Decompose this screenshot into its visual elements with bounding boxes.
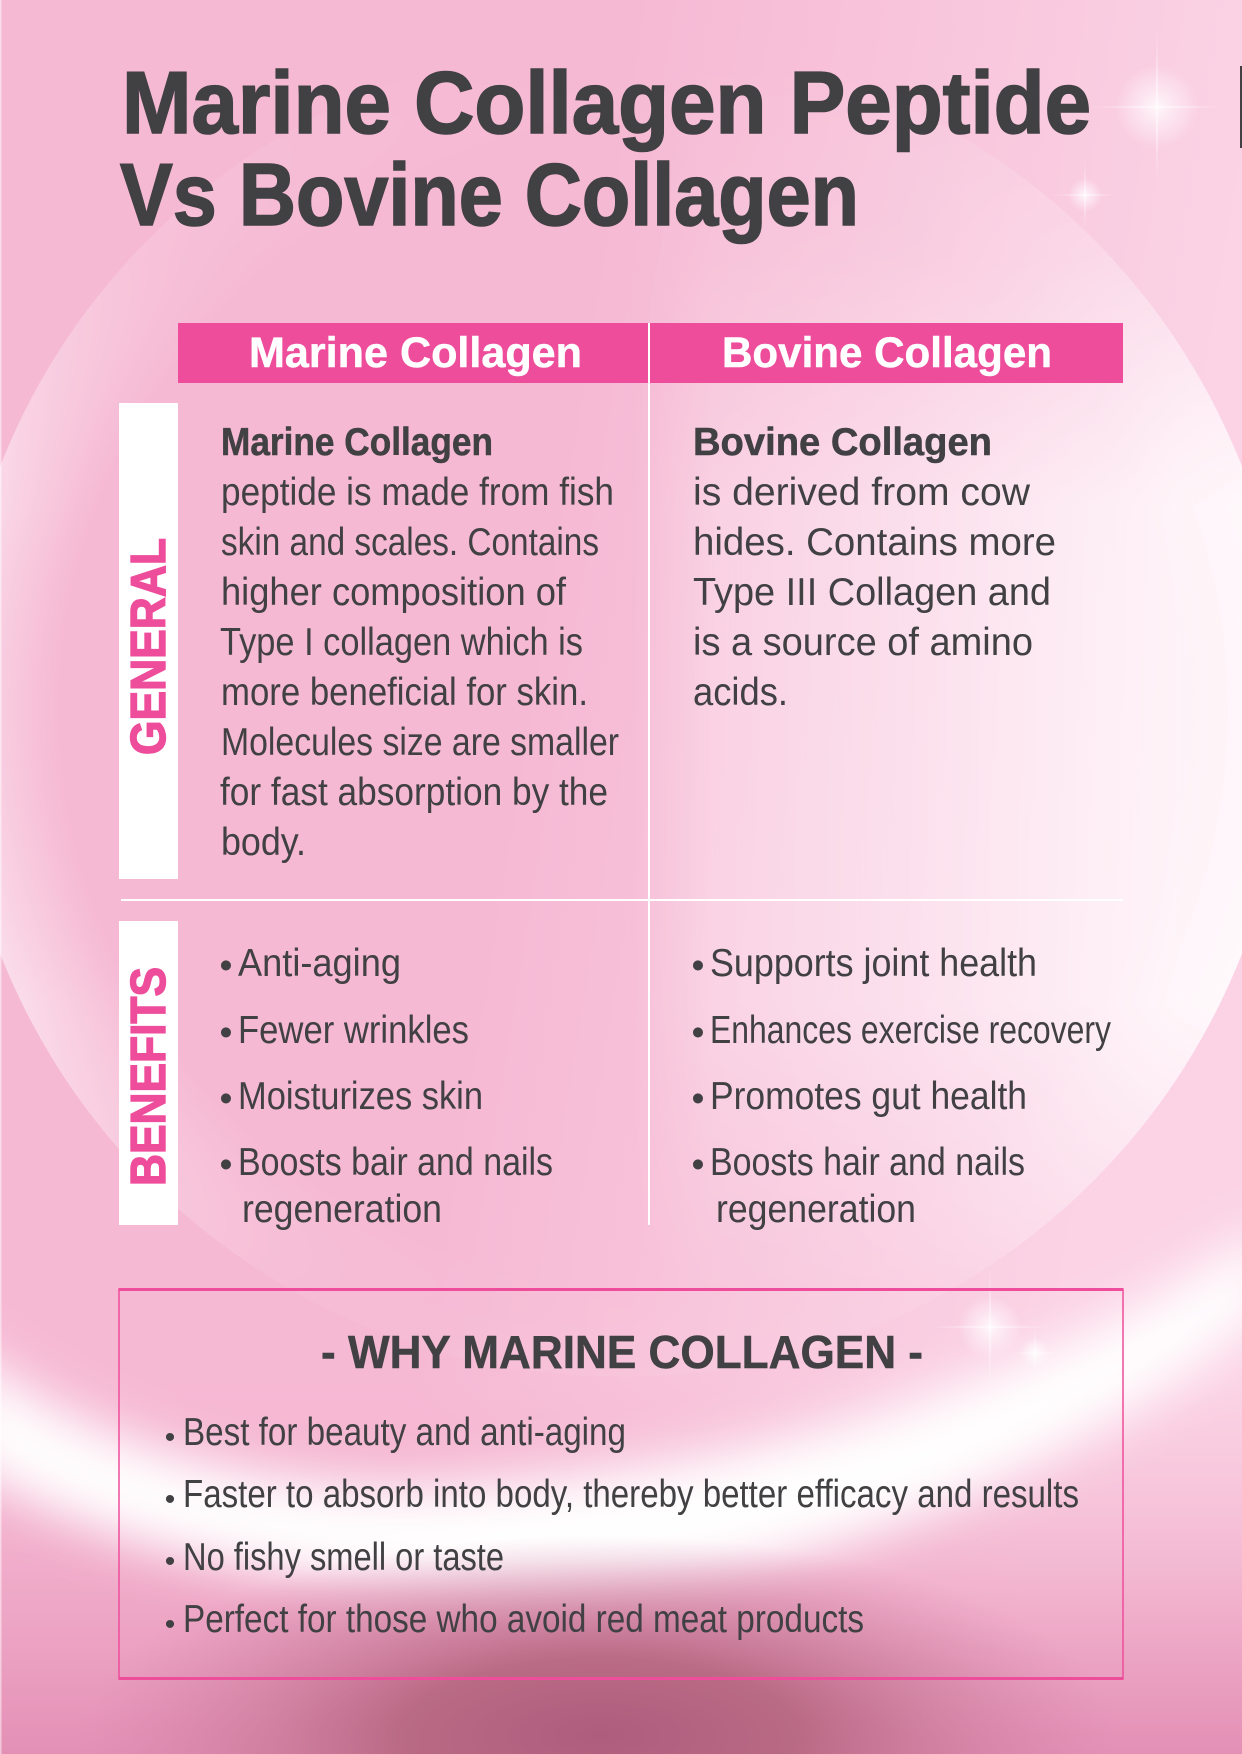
marine general text <box>220 421 619 864</box>
marine general text: skin and scales. Contains <box>221 521 599 564</box>
reasons list: No fishy smell or taste <box>183 1536 504 1579</box>
sparkle: box small <box>1011 1327 1059 1379</box>
title: Vs Bovine Collagen <box>120 145 859 244</box>
reasons list: Faster to absorb into body, thereby better efficacy and results <box>183 1473 1079 1516</box>
marine benefits list: Fewer wrinkles <box>238 1009 469 1052</box>
marine benefits list: Anti-aging <box>238 942 401 985</box>
reasons list: Perfect for those who avoid red meat products <box>183 1598 864 1641</box>
marine benefits list: • <box>220 1012 232 1053</box>
bovine benefits list: • <box>692 1012 704 1053</box>
marine benefits list: • <box>220 1144 232 1185</box>
sparkle: box large <box>928 1261 1052 1393</box>
bovine benefits list <box>692 942 1111 1231</box>
marine general text: body. <box>221 821 306 864</box>
bovine benefits list: • <box>692 945 704 986</box>
bovine general text: is a source of amino <box>693 621 1033 664</box>
heading: - WHY MARINE COLLAGEN - <box>321 1326 923 1378</box>
row label: general <box>119 403 178 879</box>
reasons list: • <box>165 1545 175 1578</box>
bovine benefits list: Supports joint health <box>710 942 1037 985</box>
title: Marine Collagen Peptide <box>122 53 1091 152</box>
bovine general text <box>693 421 1056 714</box>
bovine benefits list: Enhances exercise recovery <box>710 1009 1111 1052</box>
bovine general text: acids. <box>693 671 788 714</box>
row label: general: GENERAL <box>122 538 176 755</box>
reasons list <box>165 1411 1079 1641</box>
row label: benefits: BENEFITS <box>122 967 176 1186</box>
panel: why marine collagen <box>119 1288 1123 1680</box>
reasons list: Best for beauty and anti-aging <box>183 1411 626 1454</box>
sparkle: top right small <box>1051 159 1119 231</box>
bovine benefits list: • <box>692 1078 704 1119</box>
reasons list: • <box>165 1608 175 1641</box>
marine general text: peptide is made from fish <box>221 471 614 514</box>
reasons list: • <box>165 1483 175 1516</box>
marine general text: Marine Collagen <box>221 421 493 464</box>
marine benefits list: • <box>220 1078 232 1119</box>
marine benefits list: • <box>220 945 232 986</box>
table header: Bovine Collagen <box>722 329 1052 377</box>
table header: Marine Collagen <box>249 329 582 377</box>
reasons list: • <box>165 1421 175 1454</box>
marine benefits list: Moisturizes skin <box>238 1075 483 1118</box>
sparkle: top right large <box>1089 27 1225 187</box>
marine benefits list: regeneration <box>242 1188 442 1231</box>
marine general text: higher composition of <box>221 571 566 614</box>
marine benefits list <box>220 942 553 1231</box>
marine general text: Molecules size are smaller <box>221 721 619 764</box>
bovine benefits list: Boosts hair and nails <box>710 1141 1025 1184</box>
bovine benefits list: • <box>692 1144 704 1185</box>
bovine benefits list: Promotes gut health <box>710 1075 1027 1118</box>
marine general text: Type I collagen which is <box>220 621 583 664</box>
bovine general text: Bovine Collagen <box>693 421 992 464</box>
bovine general text: Type III Collagen and <box>693 571 1051 614</box>
table header <box>178 323 1123 383</box>
bovine benefits list: regeneration <box>716 1188 916 1231</box>
marine general text: more beneficial for skin. <box>221 671 588 714</box>
marine general text: for fast absorption by the <box>220 771 608 814</box>
title <box>120 53 1091 244</box>
bovine general text: hides. Contains more <box>693 521 1056 564</box>
marine benefits list: Boosts bair and nails <box>238 1141 553 1184</box>
bovine general text: is derived from cow <box>693 471 1031 514</box>
